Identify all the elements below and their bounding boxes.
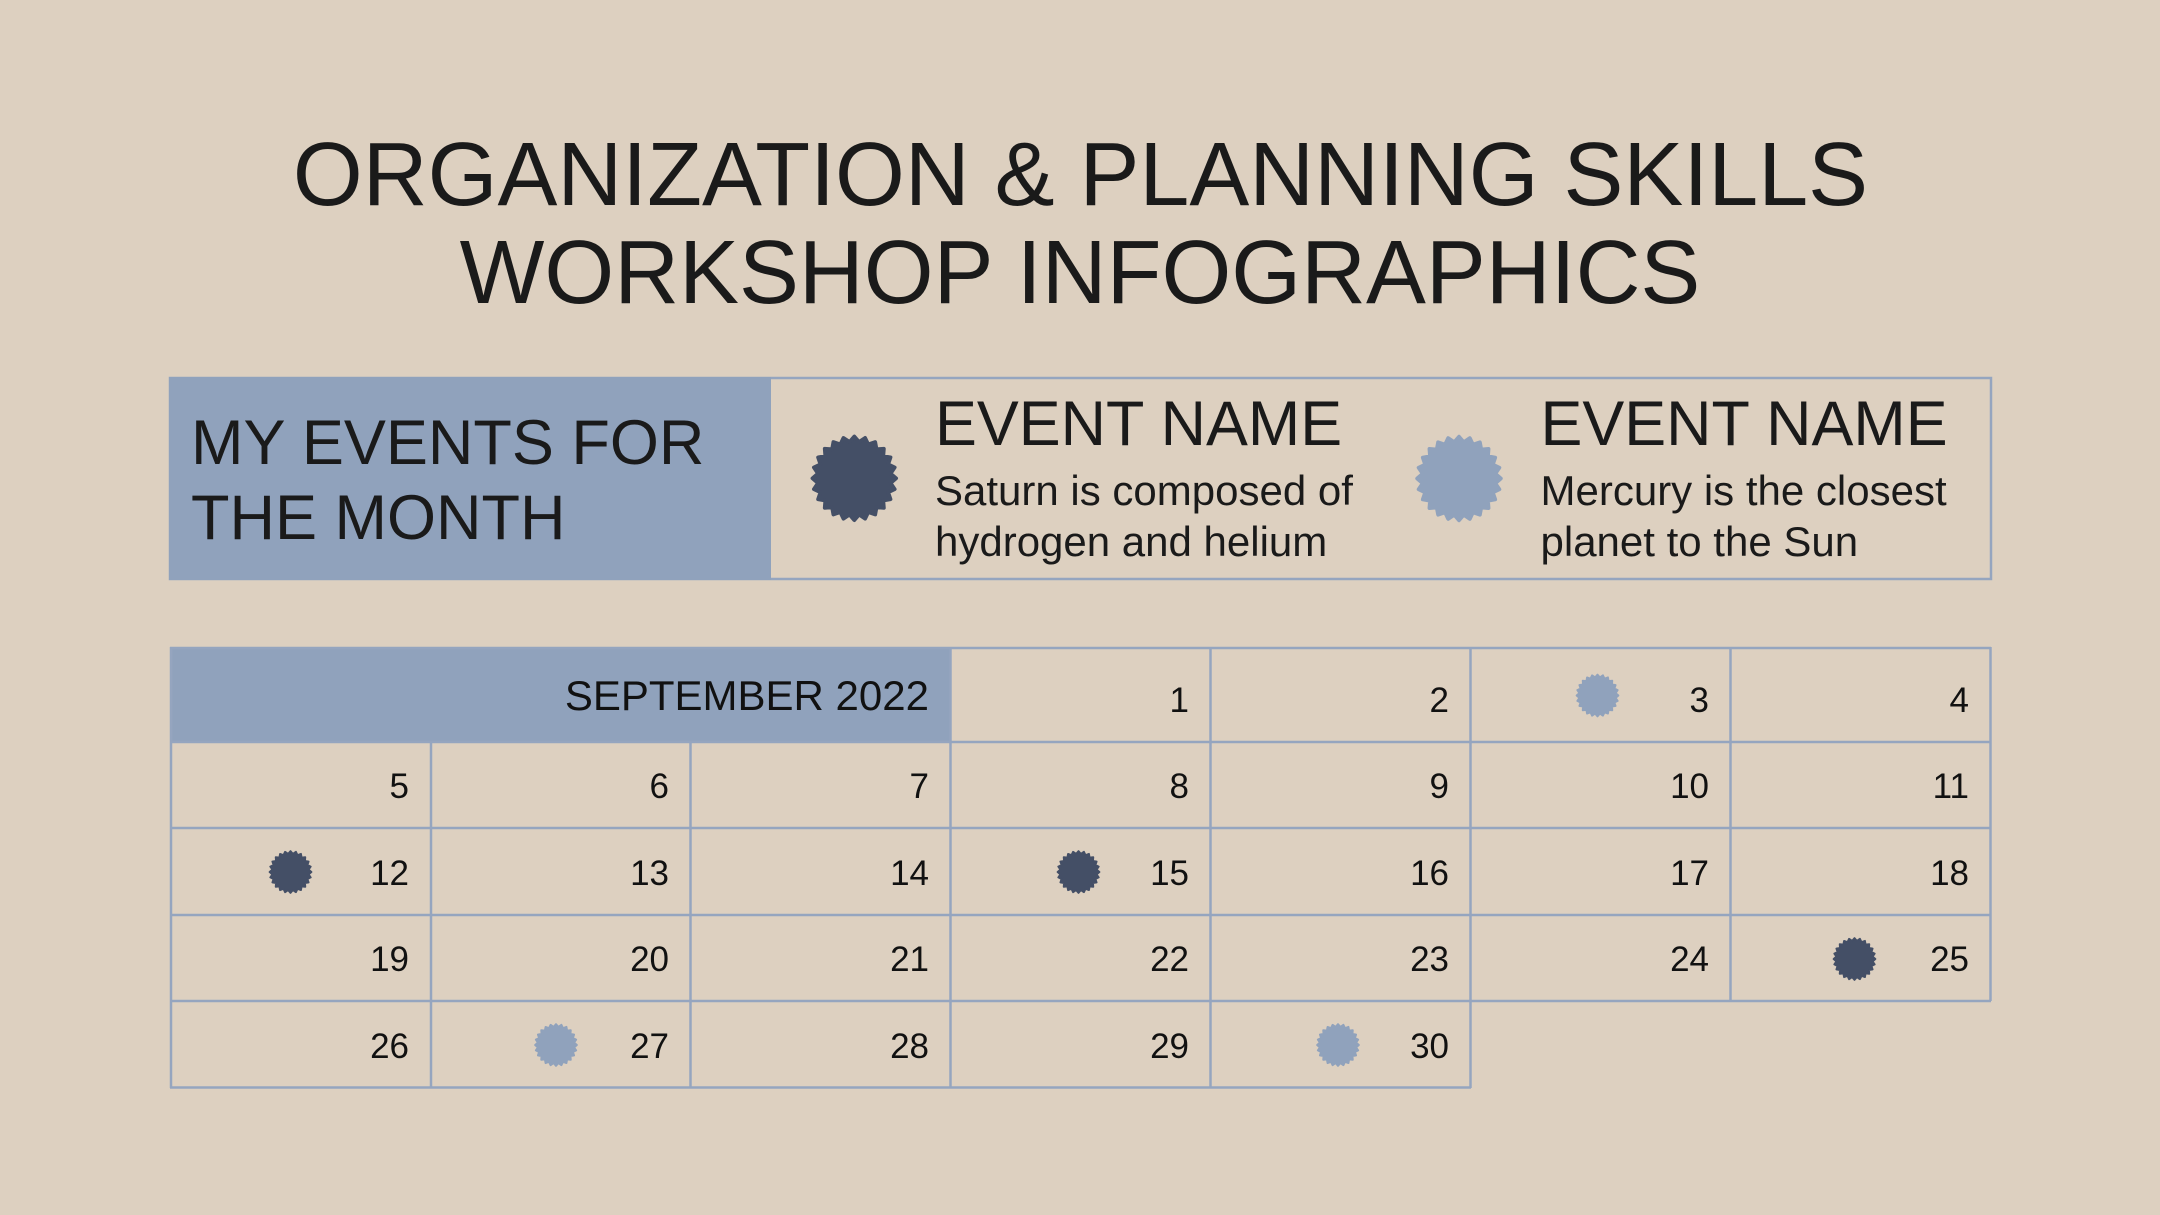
calendar dates: 7	[910, 767, 929, 806]
legend heading: MY EVENTS FOR	[191, 408, 704, 478]
calendar dates: 18	[1930, 854, 1969, 893]
icon: light event badge	[1417, 437, 1501, 520]
calendar dates	[370, 681, 1969, 1066]
calendar dates: 28	[890, 1027, 929, 1066]
title	[293, 125, 1868, 323]
calendar dates: 24	[1670, 940, 1709, 979]
marker: day 15	[1058, 851, 1099, 893]
calendar dates: 16	[1410, 854, 1449, 893]
calendar dates: 8	[1170, 767, 1189, 806]
calendar dates: 10	[1670, 767, 1709, 806]
calendar dates: 5	[390, 767, 409, 806]
calendar dates: 23	[1410, 940, 1449, 979]
calendar dates: 25	[1930, 940, 1969, 979]
calendar header	[170, 647, 951, 743]
calendar dates: 12	[370, 854, 409, 893]
event one text	[935, 389, 1353, 565]
event one text: EVENT NAME	[935, 389, 1342, 459]
calendar dates: 14	[890, 854, 929, 893]
calendar dates: 2	[1430, 681, 1449, 720]
event one text: Saturn is composed of	[935, 467, 1353, 514]
legend heading: THE MONTH	[191, 483, 565, 553]
marker: day 30	[1317, 1024, 1359, 1066]
calendar dates: 22	[1150, 940, 1189, 979]
marker: day 3	[1577, 675, 1618, 716]
calendar dates: 29	[1150, 1027, 1189, 1066]
calendar dates: 3	[1690, 681, 1709, 720]
calendar dates: 30	[1410, 1027, 1449, 1066]
calendar dates: 9	[1430, 767, 1449, 806]
calendar dates: 21	[890, 940, 929, 979]
legend heading	[169, 377, 771, 580]
panel: events legend	[169, 377, 1991, 580]
calendar dates: 13	[630, 854, 669, 893]
calendar dates: 4	[1950, 681, 1969, 720]
event two text: EVENT NAME	[1540, 389, 1948, 459]
title: ORGANIZATION & PLANNING SKILLS	[293, 125, 1868, 225]
calendar dates: 11	[1933, 767, 1969, 806]
event two text: planet to the Sun	[1540, 518, 1858, 565]
calendar header: SEPTEMBER 2022	[565, 672, 929, 719]
calendar dates: 1	[1170, 681, 1189, 720]
marker: day 12	[270, 851, 311, 893]
calendar	[170, 647, 1991, 1088]
calendar dates: 17	[1670, 854, 1709, 893]
calendar dates: 20	[630, 940, 669, 979]
event two text: Mercury is the closest	[1540, 467, 1947, 514]
marker: day 25	[1834, 938, 1875, 980]
calendar dates: 6	[650, 767, 669, 806]
title: WORKSHOP INFOGRAPHICS	[460, 223, 1700, 323]
icon: dark event badge	[812, 436, 896, 520]
calendar dates: 15	[1150, 854, 1189, 893]
calendar dates: 26	[370, 1027, 409, 1066]
calendar dates: 27	[630, 1027, 669, 1066]
event two text	[1540, 389, 1948, 565]
calendar dates: 19	[370, 940, 409, 979]
event one text: hydrogen and helium	[935, 518, 1327, 565]
marker: day 27	[535, 1024, 577, 1066]
